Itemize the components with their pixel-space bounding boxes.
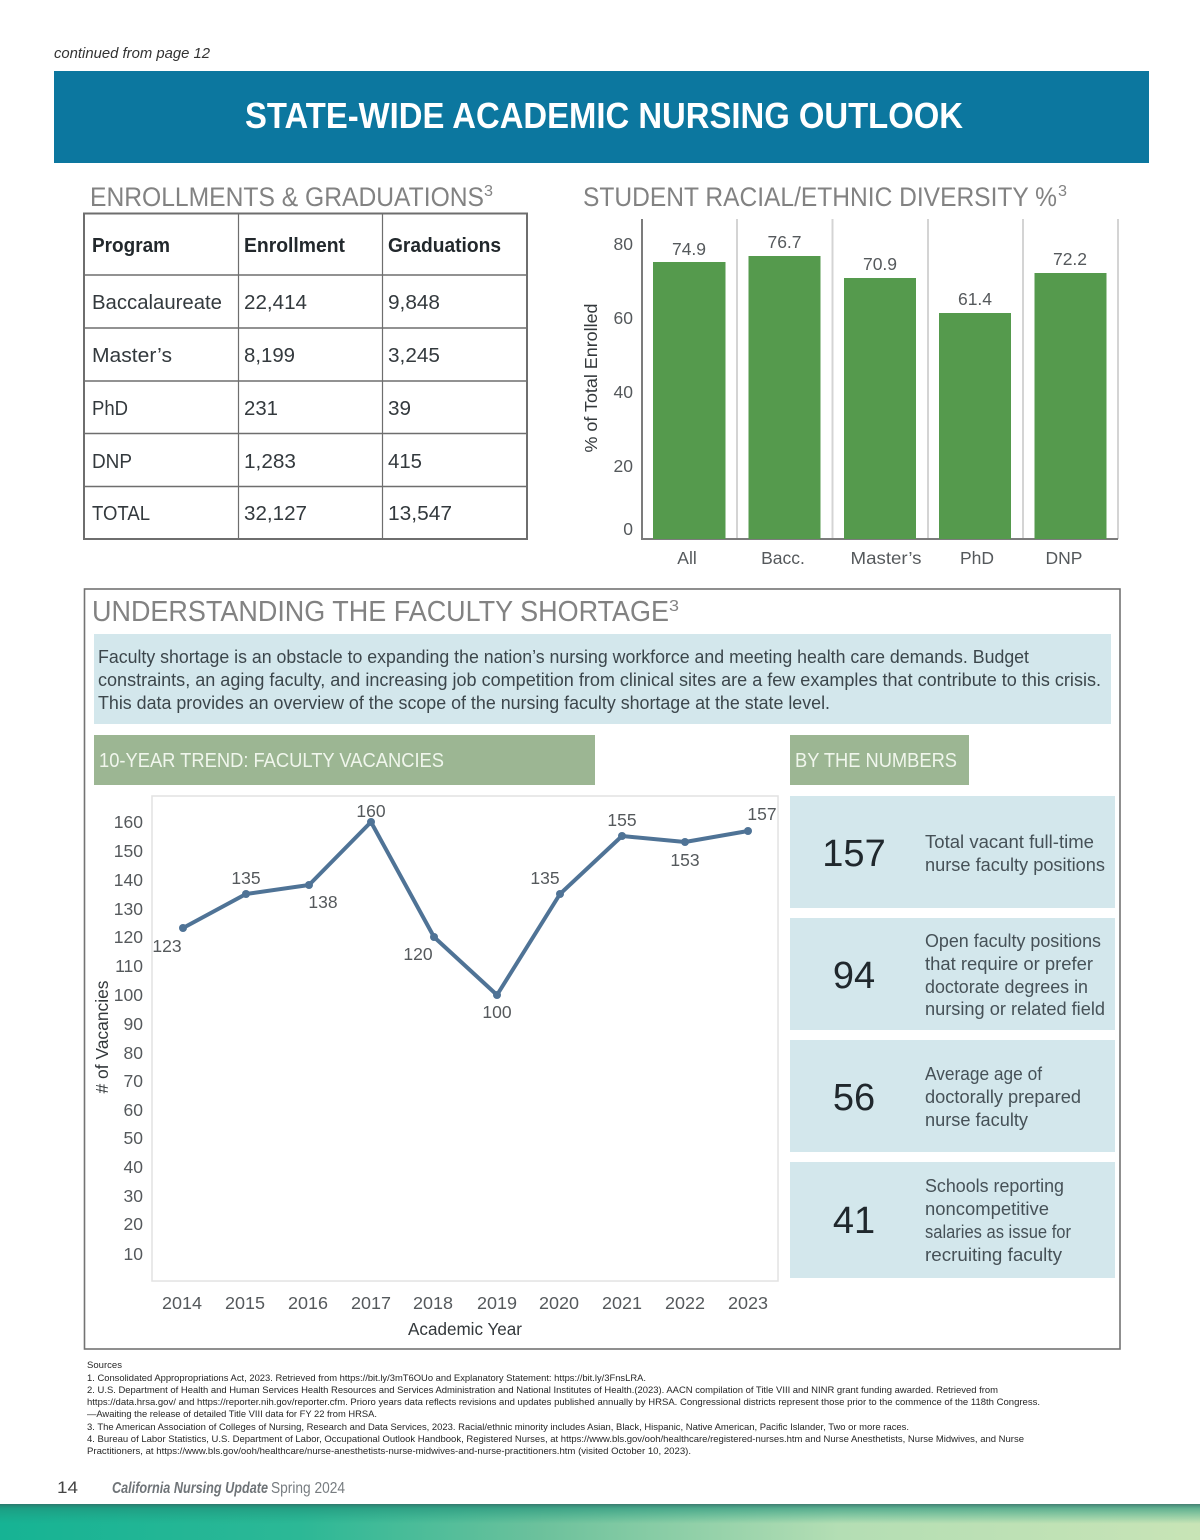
line chart: faculty vacancies: 70 xyxy=(124,1071,143,1091)
enrollment table: 39 xyxy=(388,398,411,420)
sources xyxy=(87,1360,1040,1456)
bar chart: 40 xyxy=(614,382,633,402)
enrollment table: 1,283 xyxy=(244,451,296,473)
bar chart: 61.4 xyxy=(958,289,992,309)
line chart: faculty vacancies: 50 xyxy=(124,1128,143,1148)
stat card: 157: 157 xyxy=(822,833,886,875)
line chart: faculty vacancies: 2014 xyxy=(162,1293,202,1313)
subheading: 10-year trend xyxy=(94,735,595,785)
subheading: by the numbers xyxy=(790,735,969,785)
line chart: faculty vacancies: 2023 xyxy=(728,1293,768,1313)
line chart: faculty vacancies: 138 xyxy=(308,892,338,912)
sources: 4. Bureau of Labor Statistics, U.S. Department of Labor, Occupational Outlook Handbook, Registered Nurses, at https://www.bls.gov/ooh/healthcare/registered-nurses.htm and Nurse Anesthetists, Nurse Midwives, and Nurse xyxy=(87,1434,1024,1444)
line chart: faculty vacancies: 150 xyxy=(114,841,143,861)
line chart: faculty vacancies: 160 xyxy=(114,812,143,832)
intro text block: Faculty shortage is an obstacle to expanding the nation’s nursing workforce and meeting health care demands. Budget xyxy=(98,647,1029,667)
continued note: continued from page 12 xyxy=(54,45,211,62)
line chart: faculty vacancies: 80 xyxy=(124,1043,143,1063)
enrollment table: TOTAL xyxy=(92,503,150,525)
stat card: 157: Total vacant full-time xyxy=(925,832,1094,852)
line chart: faculty vacancies: 30 xyxy=(124,1186,143,1206)
subheading: 10-year trend: 10-YEAR TREND: FACULTY VACANCIES xyxy=(99,750,444,772)
line chart: faculty vacancies: 123 xyxy=(152,936,182,956)
stat card: 56: Average age of xyxy=(925,1064,1043,1084)
bar chart: % of Total Enrolled xyxy=(581,304,601,452)
line chart: faculty vacancies: 2022 xyxy=(665,1293,705,1313)
panel: enrollments and graduations xyxy=(84,182,527,539)
stat card: 157: nurse faculty positions xyxy=(925,855,1105,875)
heading: faculty shortage: 3 xyxy=(669,598,679,615)
line chart: faculty vacancies: 40 xyxy=(124,1157,143,1177)
bar chart: 80 xyxy=(614,234,633,254)
enrollment table xyxy=(84,213,527,539)
sources: 3. The American Association of Colleges of Nursing, Research and Data Services, 2023. Racial/ethnic minority includes Asian, Black, Hispanic, Native American, Pacific Islander, Two or more races. xyxy=(87,1422,909,1432)
enrollment table: PhD xyxy=(92,398,128,420)
line chart: faculty vacancies: 153 xyxy=(670,850,700,870)
bar chart: 60 xyxy=(614,308,633,328)
footer xyxy=(57,1478,345,1497)
enrollment table: 8,199 xyxy=(244,345,295,367)
bar chart: 0 xyxy=(623,519,633,539)
sources: https://data.hrsa.gov/ and https://reporter.nih.gov/reporter.cfm. Prioro years data reflects revisions and updates published annually by HRSA. Congressional districts represent those prior to the commence of the 118th Congress. xyxy=(87,1397,1040,1407)
sources: 1. Consolidated Appropropriations Act, 2023. Retrieved from https://bit.ly/3mT6OUo and Explanatory Statement: https://bit.ly/3FnsLRA. xyxy=(87,1373,646,1383)
bar chart: Bacc. xyxy=(761,548,805,568)
enrollment table: 22,414 xyxy=(244,292,307,314)
sources: —Awaiting the release of detailed Title VIII data for FY 22 from HRSA. xyxy=(87,1409,377,1419)
line chart: faculty vacancies: 2018 xyxy=(413,1293,453,1313)
line chart: faculty vacancies: 120 xyxy=(114,927,143,947)
line chart: faculty vacancies: 2016 xyxy=(288,1293,328,1313)
enrollment table: 9,848 xyxy=(388,292,440,314)
heading: enrollments: ENROLLMENTS & GRADUATIONS xyxy=(90,182,484,212)
enrollment table: Program xyxy=(92,235,170,257)
enrollment table: Master’s xyxy=(92,345,172,367)
stat card: 56: 56 xyxy=(833,1077,875,1119)
stat card: 41: noncompetitive xyxy=(925,1199,1049,1219)
bottom gradient band xyxy=(0,1504,1200,1540)
heading: diversity: STUDENT RACIAL/ETHNIC DIVERSITY % xyxy=(583,182,1057,212)
bar chart xyxy=(581,219,1118,568)
line chart: faculty vacancies: 2017 xyxy=(351,1293,391,1313)
line chart: faculty vacancies: 2019 xyxy=(477,1293,517,1313)
line chart: faculty vacancies: 155 xyxy=(607,810,637,830)
bar chart: 70.9 xyxy=(863,254,897,274)
intro text block xyxy=(94,634,1111,724)
heading: enrollments: 3 xyxy=(484,183,493,200)
enrollment table: Graduations xyxy=(388,235,501,257)
stat card: 94: that require or prefer xyxy=(925,954,1093,974)
line chart: faculty vacancies: 2021 xyxy=(602,1293,642,1313)
stat card: 94 xyxy=(790,918,1115,1030)
sources: Practitioners, at https://www.bls.gov/ooh/healthcare/nurse-anesthetists-nurse-midwives-and-nurse-practitioners.htm (visited October 10, 2023). xyxy=(87,1446,691,1456)
line chart: faculty vacancies: 157 xyxy=(747,804,777,824)
enrollment table: 231 xyxy=(244,398,278,420)
bar chart: PhD xyxy=(960,548,994,568)
line chart: faculty vacancies: 135 xyxy=(530,868,560,888)
line chart: faculty vacancies: 140 xyxy=(114,870,143,890)
stat card: 41: Schools reporting xyxy=(925,1176,1064,1196)
stat card: 94: nursing or related field xyxy=(925,999,1105,1019)
line chart: faculty vacancies: # of Vacancies xyxy=(92,980,112,1094)
enrollment table: DNP xyxy=(92,451,132,473)
line chart: faculty vacancies: 100 xyxy=(114,985,143,1005)
stat card: 94: doctorate degrees in xyxy=(925,977,1088,997)
title banner: STATE-WIDE ACADEMIC NURSING OUTLOOK xyxy=(245,95,963,136)
heading: faculty shortage: UNDERSTANDING THE FACULTY SHORTAGE xyxy=(92,596,669,628)
line chart: faculty vacancies xyxy=(92,796,778,1339)
line chart: faculty vacancies: Academic Year xyxy=(408,1319,522,1339)
intro text block: constraints, an aging faculty, and increasing job competition from clinical sites are a few examples that contribute to this crisis. xyxy=(98,670,1101,690)
line chart: faculty vacancies: 2020 xyxy=(539,1293,579,1313)
enrollment table: Enrollment xyxy=(244,235,345,257)
stat card: 94: Open faculty positions xyxy=(925,931,1101,951)
sources: Sources xyxy=(87,1360,122,1370)
footer: 14 xyxy=(57,1478,78,1497)
stat card: 41: salaries as issue for xyxy=(925,1222,1071,1242)
stat card: 41: recruiting faculty xyxy=(925,1245,1062,1265)
bar chart: Master’s xyxy=(850,548,922,568)
stat card: 94: 94 xyxy=(833,955,875,997)
line chart: faculty vacancies: 160 xyxy=(356,801,386,821)
line chart: faculty vacancies: 20 xyxy=(124,1214,143,1234)
bar chart: All xyxy=(677,548,697,568)
footer: California Nursing Update xyxy=(112,1480,268,1497)
sources: 2. U.S. Department of Health and Human Services Health Resources and Services Administration and National Institutes of Health.(2023). AACN compilation of Title VIII and NINR grant funding awarded. Retrieved from xyxy=(87,1385,998,1395)
bar chart: 76.7 xyxy=(767,232,802,252)
stat card: 56 xyxy=(790,1040,1115,1152)
stat card: 157 xyxy=(790,796,1115,908)
line chart: faculty vacancies: 10 xyxy=(124,1244,143,1264)
footer: Spring 2024 xyxy=(271,1480,345,1497)
stat card: 41: 41 xyxy=(833,1200,875,1242)
line chart: faculty vacancies: 2015 xyxy=(225,1293,265,1313)
stat card: 41 xyxy=(790,1162,1115,1278)
heading: diversity: 3 xyxy=(1058,183,1067,200)
title banner xyxy=(54,71,1149,163)
intro text block: This data provides an overview of the scope of the nursing faculty shortage at the state level. xyxy=(98,693,830,713)
subheading: by the numbers: BY THE NUMBERS xyxy=(795,750,957,772)
enrollment table: 415 xyxy=(388,451,422,473)
bar chart: 20 xyxy=(614,456,633,476)
line chart: faculty vacancies: 110 xyxy=(115,956,143,976)
stat card: 56: doctorally prepared xyxy=(925,1087,1081,1107)
line chart: faculty vacancies: 130 xyxy=(114,899,143,919)
line chart: faculty vacancies: 120 xyxy=(403,944,433,964)
enrollment table: 13,547 xyxy=(388,503,452,525)
line chart: faculty vacancies: 60 xyxy=(124,1100,143,1120)
line chart: faculty vacancies: 135 xyxy=(231,868,261,888)
bar chart: DNP xyxy=(1046,548,1082,568)
stat card: 56: nurse faculty xyxy=(925,1110,1028,1130)
enrollment table: Baccalaureate xyxy=(92,292,222,314)
panel: student diversity xyxy=(581,182,1118,568)
panel: faculty shortage xyxy=(84,589,1120,1349)
enrollment table: 3,245 xyxy=(388,345,440,367)
bar chart: 74.9 xyxy=(672,239,706,259)
line chart: faculty vacancies: 100 xyxy=(482,1002,512,1022)
line chart: faculty vacancies: 90 xyxy=(124,1014,143,1034)
enrollment table: 32,127 xyxy=(244,503,307,525)
bar chart: 72.2 xyxy=(1053,249,1087,269)
